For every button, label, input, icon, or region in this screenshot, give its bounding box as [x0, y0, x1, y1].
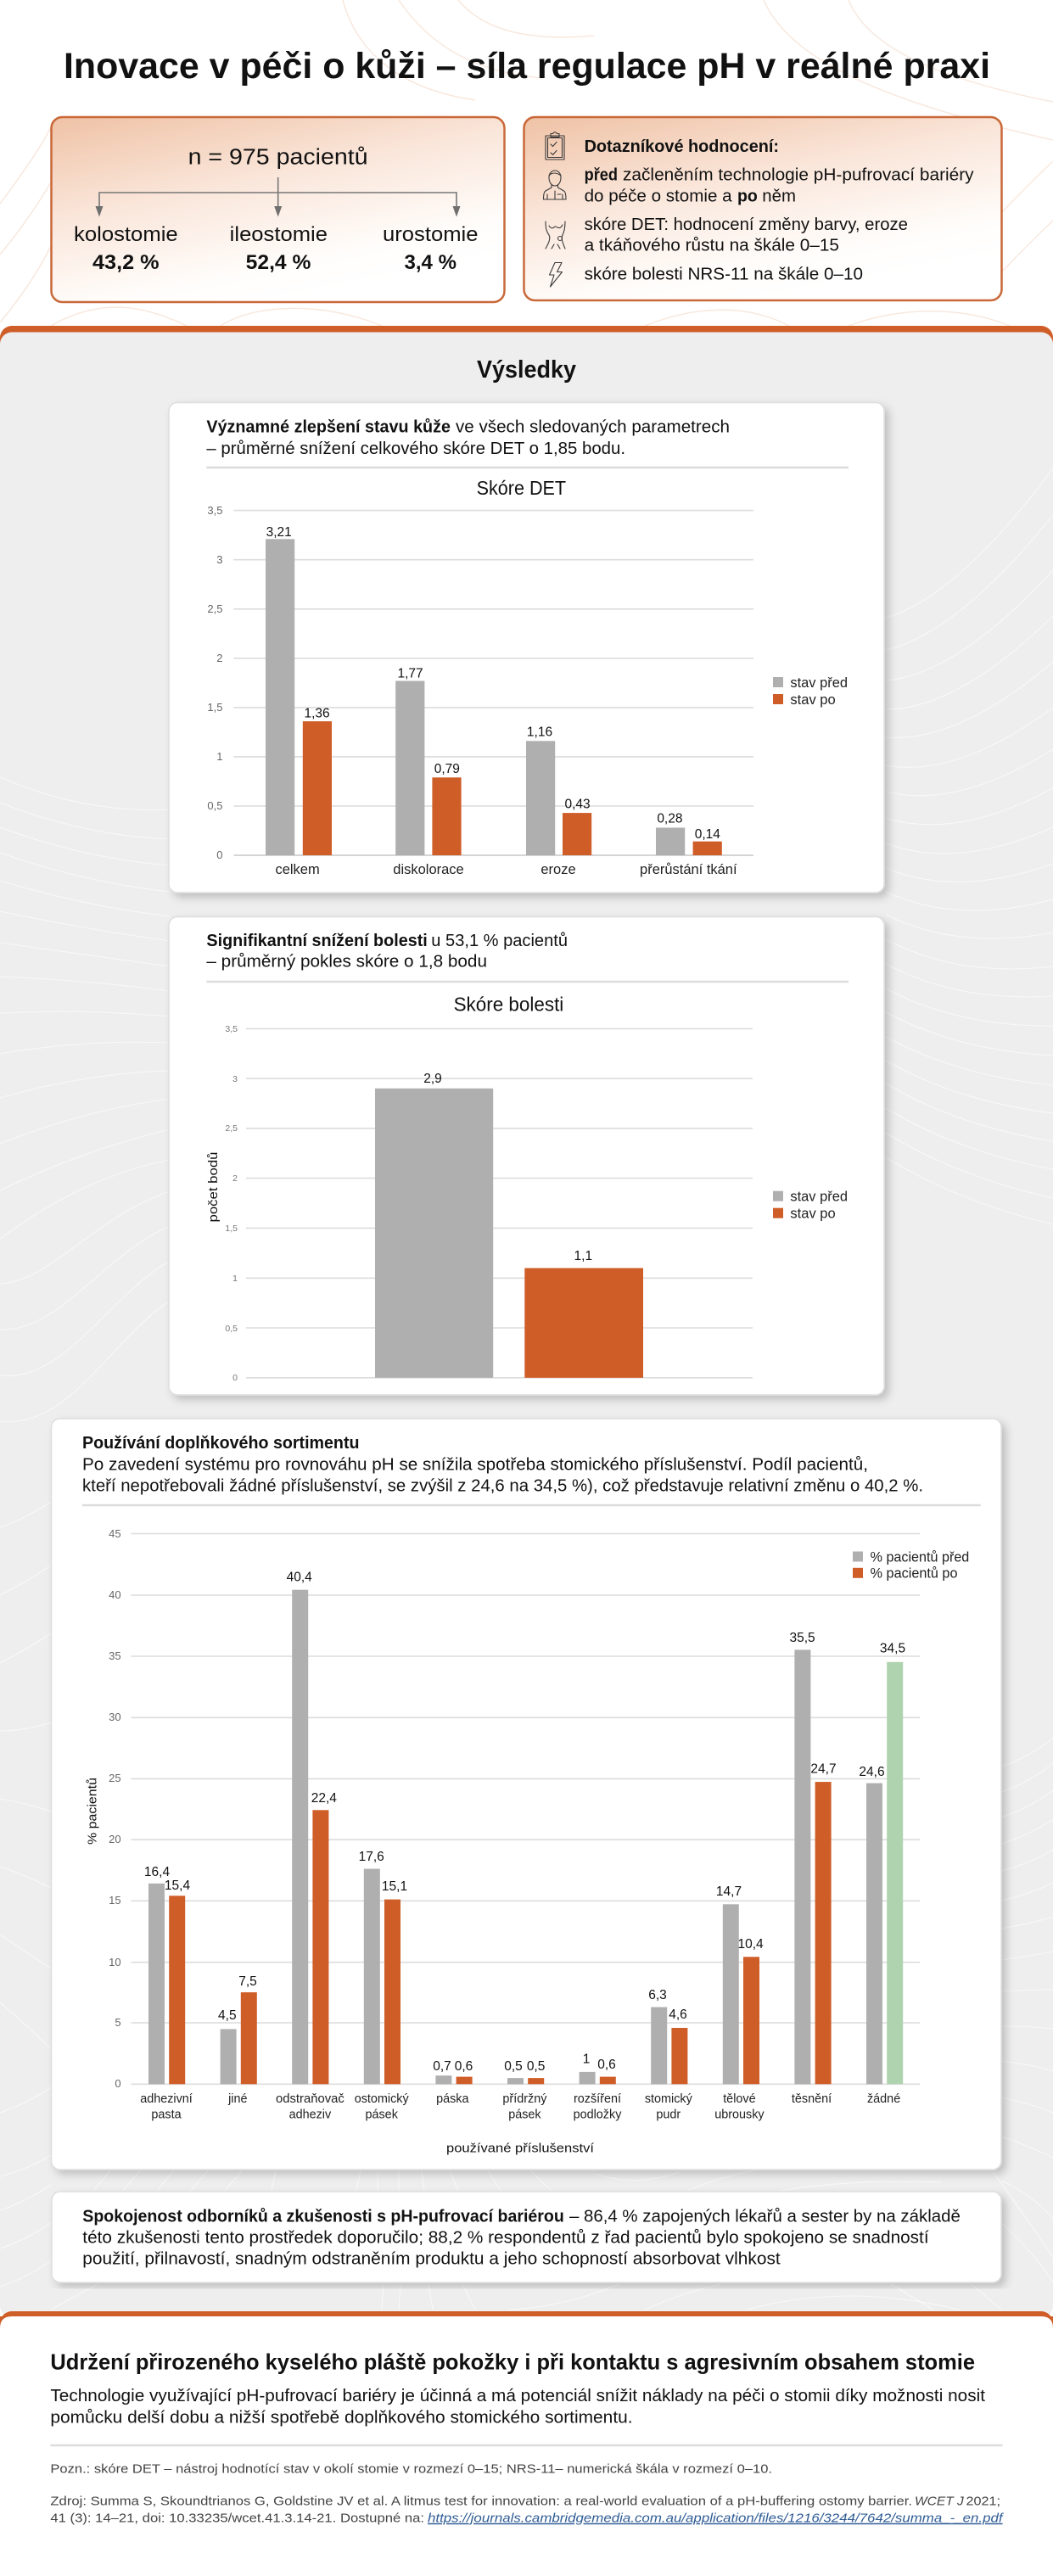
value labels: 1 — [583, 2052, 590, 2067]
colostomy: kolostomie — [74, 223, 178, 246]
source: https://journals.cambridgemedia.com.au/application/files/1216/3244/7642/summa_-_en.pdf — [428, 2512, 1005, 2526]
value labels: 0,6 — [597, 2058, 616, 2072]
category labels: podložky — [574, 2108, 622, 2122]
value labels: 0,6 — [455, 2059, 473, 2074]
legend: stav po — [790, 692, 836, 708]
value labels: 35,5 — [790, 1631, 815, 1645]
legend — [773, 675, 848, 708]
text: satisfaction: této zkušenosti tento prostředek doporučilo; 88,2 % respondentů z řad pacientů bylo spokojeno se snadností — [82, 2228, 929, 2247]
panel: conclusion — [0, 2311, 1053, 2576]
bar chart: pain score: 1 — [232, 1274, 238, 1284]
panel: supplementary products — [51, 1419, 1001, 2170]
bar chart: DET score: 1 — [216, 750, 222, 763]
value labels: 3,21 — [266, 525, 292, 540]
category labels: ostomický — [355, 2092, 409, 2106]
legend: stav před — [790, 675, 848, 691]
text: satisfaction — [82, 2207, 961, 2268]
text: pain score: skóre bolesti NRS-11 na škále 0–10 — [585, 265, 863, 283]
category labels: přerůstání tkání — [640, 862, 737, 877]
bars: after — [169, 1782, 832, 2084]
ileostomy: ileostomie — [230, 223, 328, 246]
panel: satisfaction — [52, 2192, 1001, 2282]
bar chart: accessories — [85, 1527, 969, 2156]
conclusion text — [50, 2387, 985, 2428]
value labels: 0,7 — [433, 2059, 451, 2074]
tree arrows — [95, 177, 460, 217]
value labels: 0,79 — [434, 762, 460, 776]
category labels: těsnění — [792, 2092, 832, 2106]
bars: before — [266, 539, 685, 855]
value labels: 24,6 — [859, 1765, 885, 1779]
value labels: 14,7 — [716, 1884, 742, 1899]
bar chart: pain score: 3 — [232, 1074, 238, 1084]
value labels: 15,1 — [382, 1879, 407, 1894]
axis title: počet bodů — [207, 1152, 221, 1222]
value labels: 17,6 — [359, 1850, 384, 1864]
value labels: 0,43 — [565, 797, 591, 811]
category labels: přídržný — [502, 2092, 547, 2106]
category labels: diskolorace — [393, 862, 464, 877]
text: before and after — [585, 166, 974, 205]
bar chart: DET score: 0 — [216, 848, 222, 861]
source — [50, 2495, 1005, 2526]
bar chart: DET score: 2,5 — [207, 602, 222, 615]
bar chart: accessories: 35 — [109, 1649, 121, 1662]
icon: torso — [546, 221, 565, 249]
value labels — [266, 525, 720, 842]
bar chart: accessories: 15 — [109, 1894, 121, 1907]
bar chart: accessories: 40 — [109, 1588, 121, 1601]
value labels: 6,3 — [648, 1988, 667, 2002]
value labels: 4,6 — [669, 2008, 687, 2022]
bar chart: accessories: 10 — [109, 1956, 121, 1968]
category labels: pásek — [365, 2108, 399, 2122]
category labels: ubrousky — [714, 2108, 765, 2122]
bar chart: DET score: 2 — [216, 652, 222, 664]
value labels: 1,16 — [527, 725, 552, 739]
icon: lightning bolt — [550, 263, 562, 287]
value labels: 40,4 — [287, 1571, 312, 1585]
value labels: 34,5 — [880, 1641, 905, 1656]
title: Inovace v péči o kůži – síla regulace pH v reálné praxi — [64, 46, 990, 87]
urostomy: 3,4 % — [404, 251, 456, 274]
value labels: 7,5 — [238, 1974, 257, 1989]
icon: clipboard — [546, 132, 564, 160]
colostomy — [74, 223, 178, 274]
text: skin improvement: – průměrné snížení celkového skóre DET o 1,85 bodu. — [206, 440, 625, 458]
conclusion heading: Udržení přirozeného kyselého pláště pokožky i při kontaktu s agresivním obsahem stomie — [50, 2349, 975, 2375]
category labels — [140, 2092, 900, 2122]
category labels: odstraňovač — [276, 2092, 344, 2106]
text: skin improvement: ve všech sledovaných parametrech — [456, 417, 730, 436]
value labels: 0,14 — [695, 827, 720, 842]
panel: questionnaire: a tkáňového růstu na škále 0–15 — [585, 237, 839, 255]
bar chart: pain score: 2,5 — [225, 1123, 238, 1134]
category labels: pasta — [151, 2108, 182, 2122]
bars: after — [303, 721, 722, 855]
category labels: páska — [436, 2092, 469, 2106]
text: supplementary products: Používání doplňkového sortimentu — [82, 1433, 360, 1453]
value labels: 1,77 — [398, 667, 423, 680]
text: pain reduction — [206, 932, 568, 972]
text: before and after: něm — [762, 187, 796, 205]
category labels: pásek — [508, 2108, 541, 2122]
patient count: n = 975 pacientů — [188, 146, 368, 170]
category labels: pudr — [656, 2108, 681, 2122]
bar chart: DET score: 1,5 — [207, 701, 222, 714]
value labels: 2,9 — [423, 1072, 442, 1086]
text: supplementary products: Po zavedení systému pro rovnováhu pH se snížila spotřeba stomického příslušenství. Podíl pacientů, — [82, 1454, 868, 1475]
chart title: Skóre bolesti — [454, 994, 563, 1016]
bar chart: pain score: 0,5 — [225, 1324, 238, 1334]
value labels — [144, 1571, 905, 2074]
urostomy: urostomie — [383, 223, 479, 246]
category labels: adhezivní — [140, 2092, 193, 2106]
text: before and after: po — [737, 187, 758, 205]
text: before and after: do péče o stomie a — [585, 187, 732, 205]
bar chart: pain score: 1,5 — [225, 1224, 238, 1234]
panel: results background — [0, 326, 1053, 2318]
bar chart: accessories: 45 — [109, 1527, 121, 1540]
source: Zdroj: Summa S, Skoundtrianos G, Goldstine JV et al. A litmus test for innovation: a real-world evaluation of a pH-buffering ostomy barrier. — [50, 2495, 912, 2509]
bar chart: pain score — [207, 1024, 848, 1383]
value labels: 0,5 — [527, 2059, 545, 2074]
bars: before — [148, 1590, 882, 2084]
bar chart: accessories: 5 — [115, 2016, 121, 2029]
conclusion text: Technologie využívající pH-pufrovací bariéry je účinná a má potenciál snížit náklady na péči o stomii díky možnosti nosit — [50, 2387, 985, 2405]
conclusion text: pomůcku delší dobu a nižší spotřebě doplňkového stomického sortimentu. — [50, 2409, 633, 2428]
text: supplementary products — [82, 1433, 923, 1495]
source: 2021; — [966, 2495, 1000, 2509]
bar chart: accessories: 20 — [109, 1833, 121, 1845]
bar: after — [524, 1268, 643, 1378]
text: pain reduction: u 53,1 % pacientů — [431, 932, 568, 950]
value labels: 22,4 — [311, 1791, 337, 1806]
bar chart: pain score: 2 — [232, 1173, 238, 1184]
bar chart: pain score: 0 — [232, 1373, 238, 1383]
panel: DET score — [169, 402, 884, 893]
bar chart: DET score: 0,5 — [207, 799, 222, 812]
ileostomy — [230, 223, 328, 274]
value labels: 0,5 — [504, 2059, 523, 2074]
bar chart: accessories: 0 — [115, 2077, 121, 2090]
bar chart: DET score: 3,5 — [207, 504, 222, 517]
text: skin improvement: Významné zlepšení stavu kůže — [206, 417, 451, 436]
text: before and after: před — [585, 166, 618, 185]
source: 41 (3): 14–21, doi: 10.33235/wcet.41.3.14-21. Dostupné na: — [50, 2512, 424, 2526]
icon: person — [543, 171, 566, 199]
value labels: 1,36 — [305, 706, 330, 721]
text: pain reduction: Signifikantní snížení bolesti — [206, 932, 428, 950]
panel: pain score — [169, 916, 884, 1395]
legend: % pacientů před — [871, 1549, 969, 1565]
legend — [773, 1190, 848, 1222]
value labels: 1,1 — [574, 1249, 592, 1263]
bar: before — [375, 1089, 493, 1378]
colostomy: 43,2 % — [92, 251, 160, 274]
text: satisfaction: Spokojenost odborníků a zkušenosti s pH-pufrovací bariérou — [82, 2207, 564, 2226]
text: DET score: skóre DET: hodnocení změny barvy, eroze — [585, 216, 908, 234]
category labels: jiné — [227, 2092, 248, 2106]
panel: questionnaire — [524, 117, 1001, 300]
value labels: 10,4 — [738, 1937, 764, 1952]
note: Pozn.: skóre DET – nástroj hodnotící stav v okolí stomie v rozmezí 0–15; NRS-11– numerická škála v rozmezí 0–10. — [50, 2461, 772, 2476]
value labels: 16,4 — [144, 1865, 170, 1879]
value labels: 0,28 — [657, 811, 682, 826]
value labels: 24,7 — [810, 1762, 837, 1777]
heading: Dotazníkové hodnocení: — [585, 137, 779, 156]
text: pain reduction: – průměrný pokles skóre o 1,8 bodu — [206, 953, 487, 972]
bar chart: DET score: 3 — [216, 553, 222, 566]
category labels — [275, 862, 737, 877]
legend — [853, 1549, 969, 1581]
text: satisfaction: použití, přilnavostí, snadným odstraněním produktu a jeho schopností absorbovat vlhkost — [82, 2249, 781, 2268]
value labels — [423, 1072, 592, 1263]
category labels: eroze — [541, 862, 576, 877]
category labels: tělové — [723, 2092, 756, 2106]
ileostomy: 52,4 % — [246, 251, 311, 274]
text: supplementary products: kteří nepotřebovali žádné příslušenství, se zvýšil z 24,6 na 34,5 %), což představuje relativní změnu o 40,2 %. — [82, 1476, 923, 1495]
panel: patients — [51, 117, 504, 302]
heading: results: Výsledky — [477, 356, 576, 384]
bar chart: accessories: 25 — [109, 1772, 121, 1784]
axis title: % pacientů — [85, 1778, 100, 1845]
category labels: celkem — [275, 862, 320, 877]
bar chart: DET score — [207, 504, 848, 877]
legend: % pacientů po — [871, 1565, 957, 1581]
value labels: 4,5 — [218, 2008, 237, 2023]
category labels: žádné — [867, 2092, 900, 2106]
category labels: adheziv — [289, 2108, 332, 2122]
x axis title: používané příslušenství — [446, 2142, 595, 2156]
text: skin improvement — [206, 417, 730, 458]
legend: stav před — [790, 1190, 848, 1205]
category labels: stomický — [645, 2092, 693, 2106]
category labels: rozšíření — [574, 2092, 621, 2106]
value labels: 15,4 — [165, 1879, 190, 1893]
bar chart: accessories: 30 — [109, 1711, 121, 1723]
text: satisfaction: – 86,4 % zapojených lékařů a sester by na základě — [569, 2207, 961, 2226]
urostomy — [383, 223, 479, 274]
bar: none after — [887, 1662, 903, 2084]
legend: stav po — [790, 1207, 836, 1222]
source: WCET J — [915, 2495, 964, 2509]
text: before and after: začleněním technologie pH-pufrovací bariéry — [623, 166, 974, 185]
bar chart: pain score: 3,5 — [225, 1024, 238, 1034]
chart title: Skóre DET — [477, 477, 566, 499]
